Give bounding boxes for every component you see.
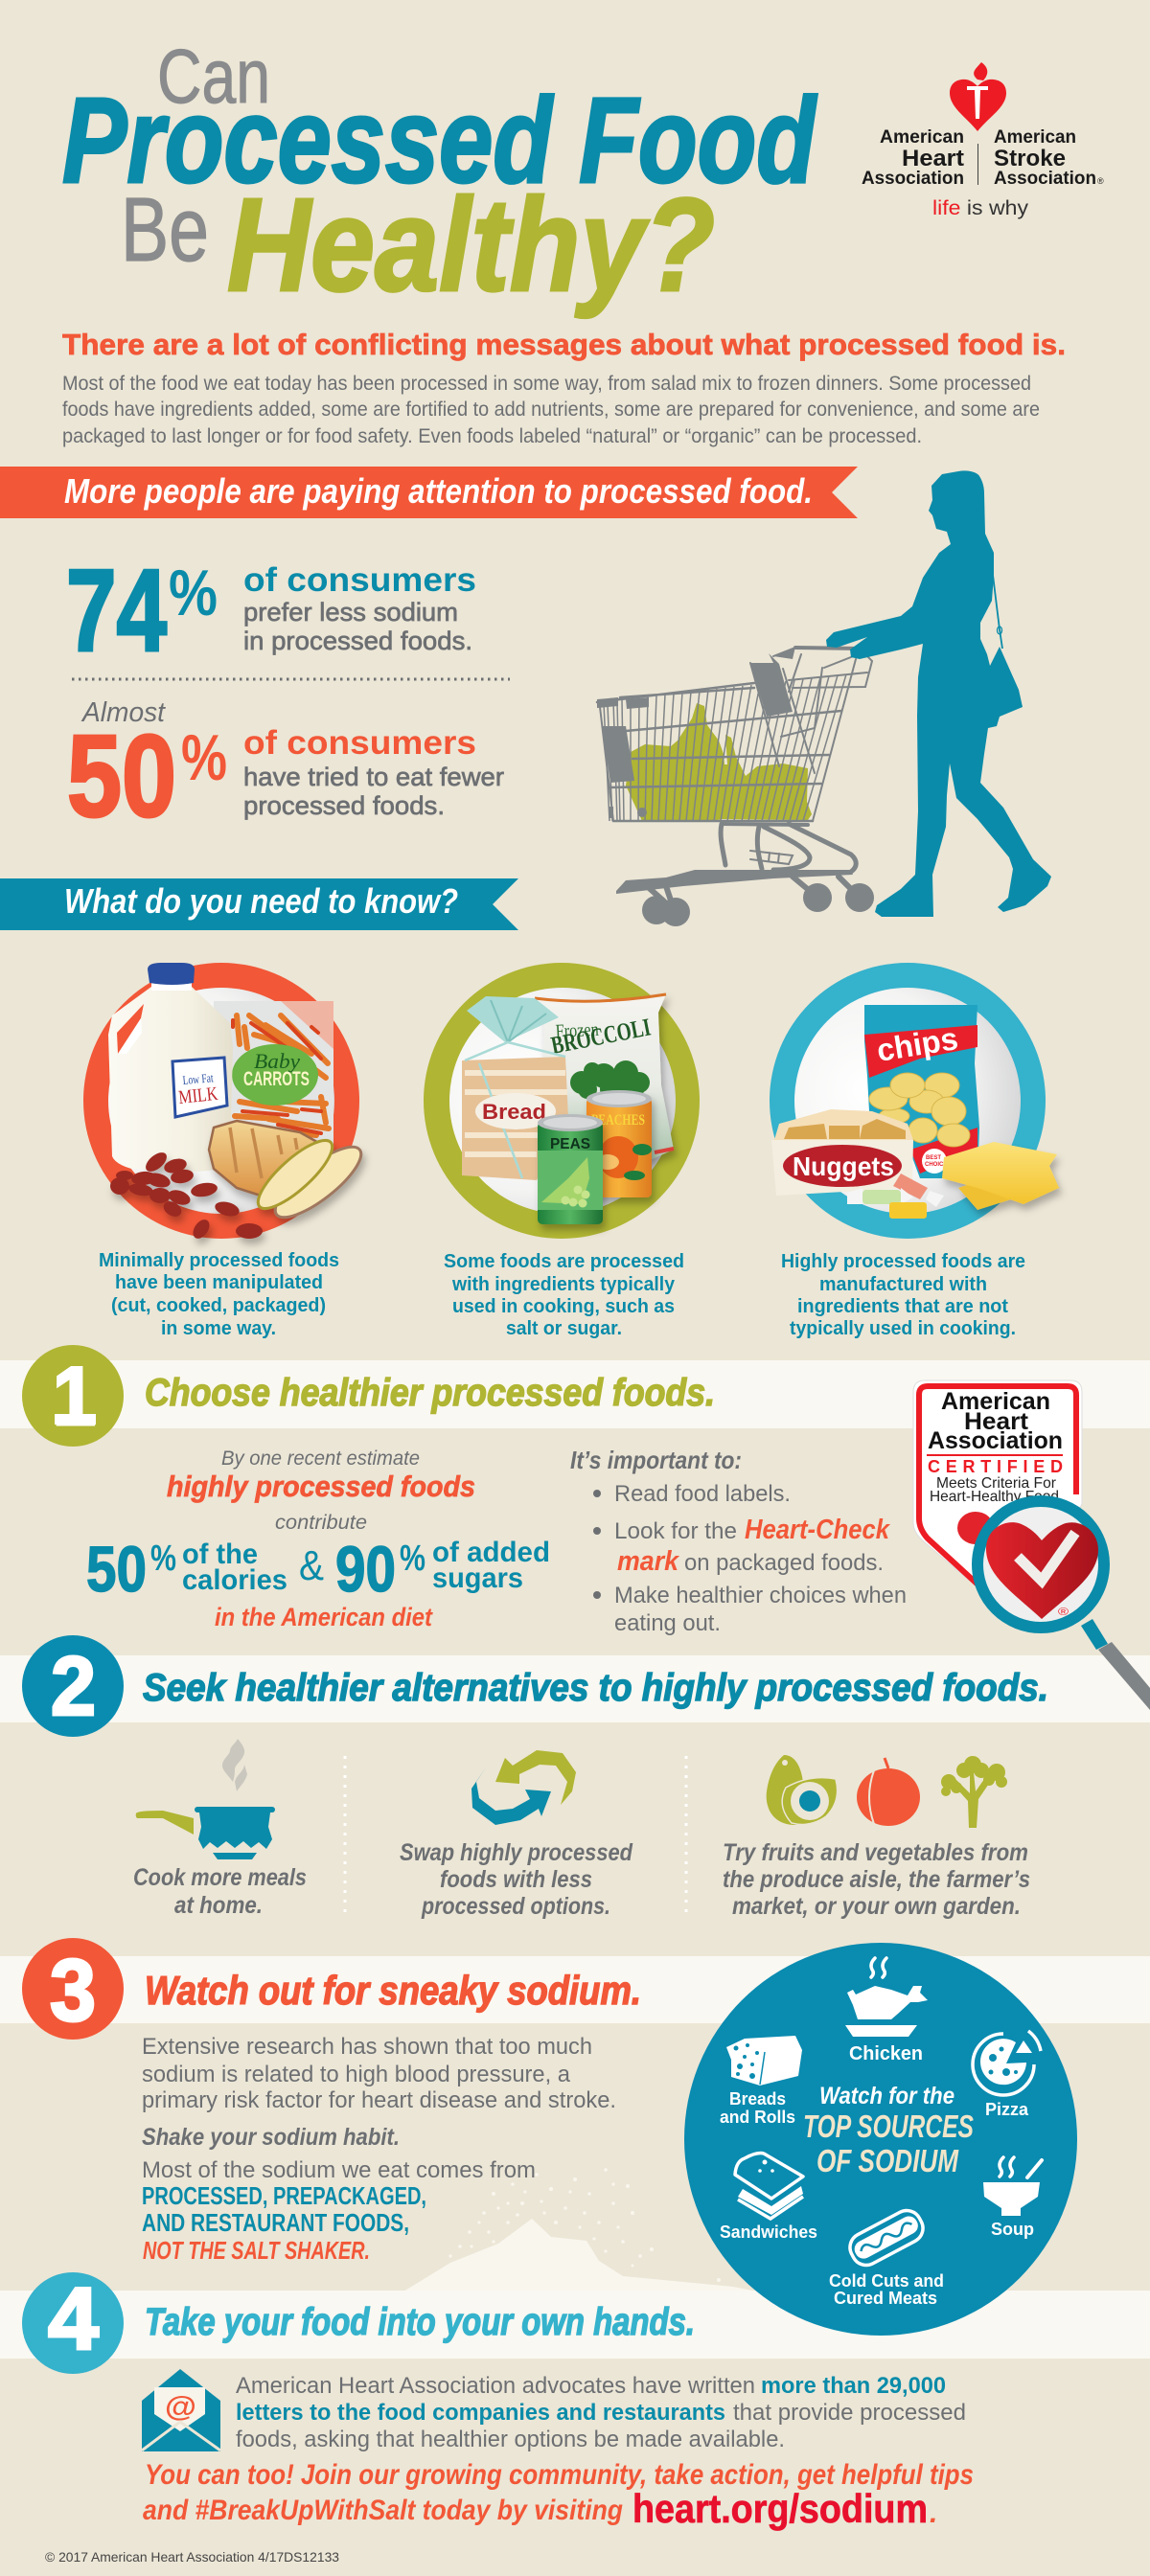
icon: bread loaf [462, 996, 568, 1180]
icon: heart-check certification badge: Heart [964, 1408, 1029, 1435]
section 3 body text: sodium is related to high blood pressure, a [142, 2062, 571, 2087]
stat: 74 percent: of consumers [243, 561, 476, 599]
logo: American Heart Association [862, 62, 1104, 219]
stat: almost 50 percent: of consumers [243, 724, 476, 762]
stat: almost 50 percent: have tried to eat fewer [243, 763, 504, 791]
banner: more people are paying attention [0, 467, 858, 518]
statistic block: american diet: in the American diet [215, 1603, 433, 1631]
title: Can [157, 34, 270, 119]
list: it's important to: Make healthier choices when [614, 1583, 907, 1608]
text: swap highly processed: processed options. [421, 1893, 610, 1920]
caption: highly processed: typically used in cooking. [790, 1318, 1016, 1339]
icon: milk jug: MILK [177, 1083, 219, 1108]
banner: more people are paying attention: More people are paying attention to processed food. [64, 471, 813, 511]
list: it's important to: eating out. [614, 1610, 721, 1636]
icon: steaming pot [136, 1739, 275, 1859]
icon: swap arrows [472, 1750, 576, 1825]
icon: frozen broccoli bag: Frozen [555, 1019, 599, 1042]
icon: can of peas [538, 1114, 603, 1224]
section 3 body text: AND RESTAURANT FOODS, [142, 2208, 409, 2237]
text: cook more meals: at home. [174, 1892, 263, 1919]
text: watch for the top sources of sodium: TOP SOURCES [803, 2109, 974, 2144]
icon: frozen broccoli bag: BROCCOLI [549, 1013, 653, 1060]
section 4 number: 4 [48, 2270, 99, 2368]
icon: hot dog [845, 2205, 928, 2270]
icon: envelope with @ sign: @ [165, 2391, 196, 2423]
section 3 body text: primary risk factor for heart disease and stroke. [142, 2087, 616, 2113]
icon: heart-check certification badge: Association [928, 1427, 1063, 1454]
section 4 body text: letters to the food companies and restaurants [236, 2400, 725, 2426]
caption: minimally processed: Minimally processed foods [99, 1250, 339, 1271]
section 1 band [0, 1360, 1150, 1428]
icon: envelope with @ sign [142, 2369, 220, 2451]
caption: minimally processed: in some way. [161, 1318, 276, 1339]
call to action: heart.org/sodium [632, 2486, 928, 2531]
banner: what do you need to know: What do you need to know? [64, 881, 458, 921]
icon: heart-check certification badge: CERTIFIED [928, 1457, 1063, 1476]
logo: American Heart Association: American [880, 127, 964, 148]
icon: can of peaches: PEACHES [591, 1112, 645, 1128]
logo: American Heart Association: Stroke [994, 146, 1066, 171]
stat: almost 50 percent [67, 697, 504, 841]
caption: minimally processed: have been manipulated [115, 1272, 323, 1293]
text: try fruits and vegetables: market, or your own garden. [732, 1893, 1021, 1920]
section 1 number: 1 [53, 1351, 96, 1443]
text: watch for the top sources of sodium: OF SODIUM [816, 2143, 959, 2178]
section 3 body text: Most of the sodium we eat comes from [142, 2157, 536, 2183]
icon: heart-check certification badge: Heart-Healthy Food [930, 1489, 1059, 1505]
text: cook more meals [133, 1864, 307, 1919]
section 4 band [0, 2291, 1150, 2359]
icon: nuggets box: Nuggets [793, 1151, 894, 1181]
section 4 body text: American Heart Association advocates have written [236, 2373, 755, 2399]
logo: American Heart Association: ® [1097, 176, 1104, 186]
text: breads and rolls: Breads [729, 2089, 786, 2109]
icon: can of peaches [586, 1090, 652, 1197]
illustration: woman silhouette [826, 470, 1051, 917]
title: Healthy? [227, 171, 715, 319]
text: watch for the top sources of sodium: Watch for the [819, 2083, 954, 2109]
section 3 number: 3 [50, 1942, 96, 2040]
intro paragraph: foods have ingredients added, some are fortified to add nutrients, some are prepared for convenience, and some are [62, 399, 1040, 421]
icon: milk jug: Low Fat [182, 1070, 214, 1087]
text: cold cuts and cured meats: Cold Cuts and [829, 2271, 944, 2291]
title: Be [121, 179, 209, 281]
icon: baby carrots bag: CARROTS [243, 1068, 310, 1090]
call to action: . [930, 2497, 937, 2529]
icon: frozen broccoli bag [535, 994, 674, 1159]
logo: American Heart Association: life is why [932, 197, 1029, 219]
text: try fruits and vegetables: Try fruits and vegetables from [723, 1839, 1028, 1866]
caption: some processed: salt or sugar. [506, 1318, 622, 1339]
section 2 number: 2 [51, 1640, 96, 1733]
statistic block: american diet: 50 [86, 1534, 147, 1606]
panel: some processed foods [424, 963, 700, 1239]
intro paragraph: Most of the food we eat today has been processed in some way, from salad mix to frozen dinners. Some processed [62, 373, 1031, 395]
banner: what do you need to know [0, 878, 518, 930]
icon: heart-check certification badge: Meets Criteria For [936, 1475, 1057, 1492]
title: Processed Food [62, 73, 817, 208]
section 4 body text [236, 2373, 966, 2452]
panel: minimally processed foods [83, 963, 370, 1242]
icon: bread [726, 2036, 802, 2086]
icon: bag of chips [864, 1005, 979, 1178]
icon: chicken [845, 1958, 928, 2037]
caption: highly processed [781, 1251, 1025, 1339]
section 2 heading: Seek healthier alternatives to highly processed foods. [143, 1667, 1048, 1709]
illustration: shopping cart [597, 647, 874, 926]
section 4 heading: Take your food into your own hands. [145, 2301, 695, 2343]
icon: magnifying glass: ® [1058, 1607, 1069, 1618]
statistic block: american diet: of the [182, 1539, 258, 1570]
list: it's important to: on packaged foods. [684, 1550, 884, 1576]
icon: candies [847, 1174, 944, 1219]
panel: top sources of sodium [684, 1943, 1077, 2336]
icon: pizza [973, 2031, 1041, 2095]
text: try fruits and vegetables [723, 1839, 1030, 1920]
list: it's important to [570, 1446, 907, 1636]
title [62, 34, 817, 319]
text: cold cuts and cured meats [829, 2271, 944, 2308]
icon: nuggets box [771, 1109, 913, 1196]
icon: heart-check certification badge [913, 1380, 1082, 1624]
statistic block: american diet: calories [182, 1564, 288, 1596]
icon: can of peas: PEAS [550, 1136, 590, 1152]
caption: minimally processed [99, 1250, 339, 1339]
stat: almost 50 percent: processed foods. [243, 791, 445, 820]
logo: American Heart Association: Association [862, 169, 964, 189]
list: it's important to: It’s important to: [570, 1446, 742, 1474]
icon: soup bowl [983, 2157, 1042, 2216]
text: cook more meals: Cook more meals [133, 1864, 307, 1891]
statistic block: american diet: & [299, 1542, 324, 1589]
text: soup: Soup [991, 2220, 1034, 2239]
section 3 body text: Shake your sodium habit. [142, 2124, 400, 2151]
statistic block: american diet: % [150, 1539, 176, 1579]
call to action: and #BreakUpWithSalt today by visiting [143, 2495, 623, 2526]
caption: highly processed: Highly processed foods are [781, 1251, 1025, 1272]
caption: some processed [444, 1251, 684, 1339]
icon: baby carrots bag [214, 1001, 334, 1150]
text: swap highly processed: foods with less [440, 1866, 592, 1893]
icon: bread loaf: Bread [482, 1100, 546, 1124]
intro paragraph: packaged to last longer or for food safety. Even foods labeled “natural” or “organic” can be processed. [62, 425, 922, 447]
section 3 body text: PROCESSED, PREPACKAGED, [142, 2181, 426, 2210]
icon: magnifying glass [978, 1501, 1150, 1710]
caption: some processed: with ingredients typically [451, 1274, 676, 1295]
logo: American Heart Association: Heart [902, 146, 964, 171]
icon: bag of chips: chips [874, 1020, 960, 1068]
statistic block: american diet: sugars [432, 1562, 523, 1594]
section 3 body text: Extensive research has shown that too much [142, 2034, 592, 2060]
text: breads and rolls [720, 2089, 795, 2127]
statistic block: american diet: of added [432, 1537, 550, 1568]
text: pizza: Pizza [985, 2100, 1029, 2119]
stat: 74 percent: 74 [66, 545, 167, 675]
section 3 heading: Watch out for sneaky sodium. [145, 1968, 641, 2013]
caption: minimally processed: (cut, cooked, packaged) [111, 1295, 326, 1316]
text: chicken: Chicken [849, 2043, 923, 2064]
panel: highly processed foods [770, 963, 1060, 1239]
section 4 number [22, 2270, 124, 2374]
section 1 heading: Choose healthier processed foods. [145, 1372, 715, 1414]
text: sandwiches: Sandwiches [720, 2223, 817, 2242]
section 3 body text [142, 2034, 616, 2265]
statistic block: american diet: highly processed foods [167, 1470, 475, 1503]
statistic block: american diet [86, 1448, 550, 1631]
icon: milk jug [108, 963, 233, 1172]
icon: broccoli [941, 1756, 1007, 1828]
stat: 74 percent [66, 545, 476, 675]
copyright: © 2017 American Heart Association 4/17DS12133 [45, 2549, 339, 2565]
icon: heart-check certification badge: American [941, 1388, 1050, 1415]
call to action: You can too! Join our growing community, take action, get helpful tips [145, 2459, 974, 2491]
icon: avocado [767, 1755, 838, 1825]
section 2 band [0, 1655, 1150, 1722]
section 4 body text: more than 29,000 [761, 2373, 946, 2399]
stat: almost 50 percent: % [181, 721, 227, 794]
logo: American Heart Association: American [994, 127, 1076, 148]
intro paragraph [62, 373, 1040, 447]
stat: 74 percent: in processed foods. [243, 627, 472, 655]
caption: some processed: used in cooking, such as [452, 1296, 675, 1317]
statistic block: american diet: contribute [275, 1512, 367, 1534]
statistic block: american diet: % [400, 1539, 426, 1579]
text: try fruits and vegetables: the produce aisle, the farmer’s [723, 1866, 1030, 1893]
icon: cheese slices [942, 1142, 1060, 1210]
icon: cooked chicken [209, 1121, 370, 1228]
list: it's important to: Look for the [614, 1518, 737, 1544]
section 3 number [22, 1938, 124, 2040]
statistic block: american diet: 90 [335, 1534, 396, 1606]
caption: some processed: Some foods are processed [444, 1251, 684, 1272]
call to action [143, 2459, 974, 2531]
stat: almost 50 percent: Almost [80, 697, 167, 728]
caption: highly processed: ingredients that are not [797, 1296, 1008, 1317]
icon: bag of chips: CHOICE [925, 1162, 947, 1168]
section 2 number [22, 1635, 124, 1737]
icon: kidney beans [110, 1149, 263, 1242]
list: it's important to: Heart-Check [745, 1515, 891, 1545]
stat: 74 percent: % [169, 557, 218, 629]
caption: highly processed: manufactured with [819, 1274, 987, 1295]
stat: 74 percent: prefer less sodium [243, 598, 458, 627]
text: watch for the top sources of sodium [803, 2083, 974, 2178]
icon: sandwich [735, 2154, 803, 2219]
section 1 number [22, 1345, 124, 1447]
section 4 body text: foods, asking that healthier options be made available. [236, 2427, 785, 2452]
text: swap highly processed [400, 1839, 633, 1920]
icon: salt pile [403, 2168, 757, 2291]
text: cold cuts and cured meats: Cured Meats [834, 2289, 937, 2308]
icon: baby carrots bag: Baby [254, 1049, 300, 1073]
list: it's important to: Read food labels. [614, 1481, 791, 1507]
list: it's important to: mark [617, 1546, 680, 1577]
icon: peach [857, 1758, 920, 1826]
statistic block: american diet: By one recent estimate [221, 1448, 420, 1470]
stat: almost 50 percent: 50 [67, 711, 176, 841]
section 3 band [0, 1956, 1150, 2023]
section 3 body text: NOT THE SALT SHAKER. [143, 2236, 370, 2265]
section 4 body text: that provide processed [733, 2400, 966, 2426]
subheading: conflicting messages: There are a lot of conflicting messages about what processed food is. [62, 328, 1066, 361]
logo: American Heart Association: Association [994, 169, 1096, 189]
text: breads and rolls: and Rolls [720, 2108, 795, 2127]
icon: bag of chips: BEST [926, 1155, 941, 1161]
text: swap highly processed: Swap highly processed [400, 1839, 633, 1866]
